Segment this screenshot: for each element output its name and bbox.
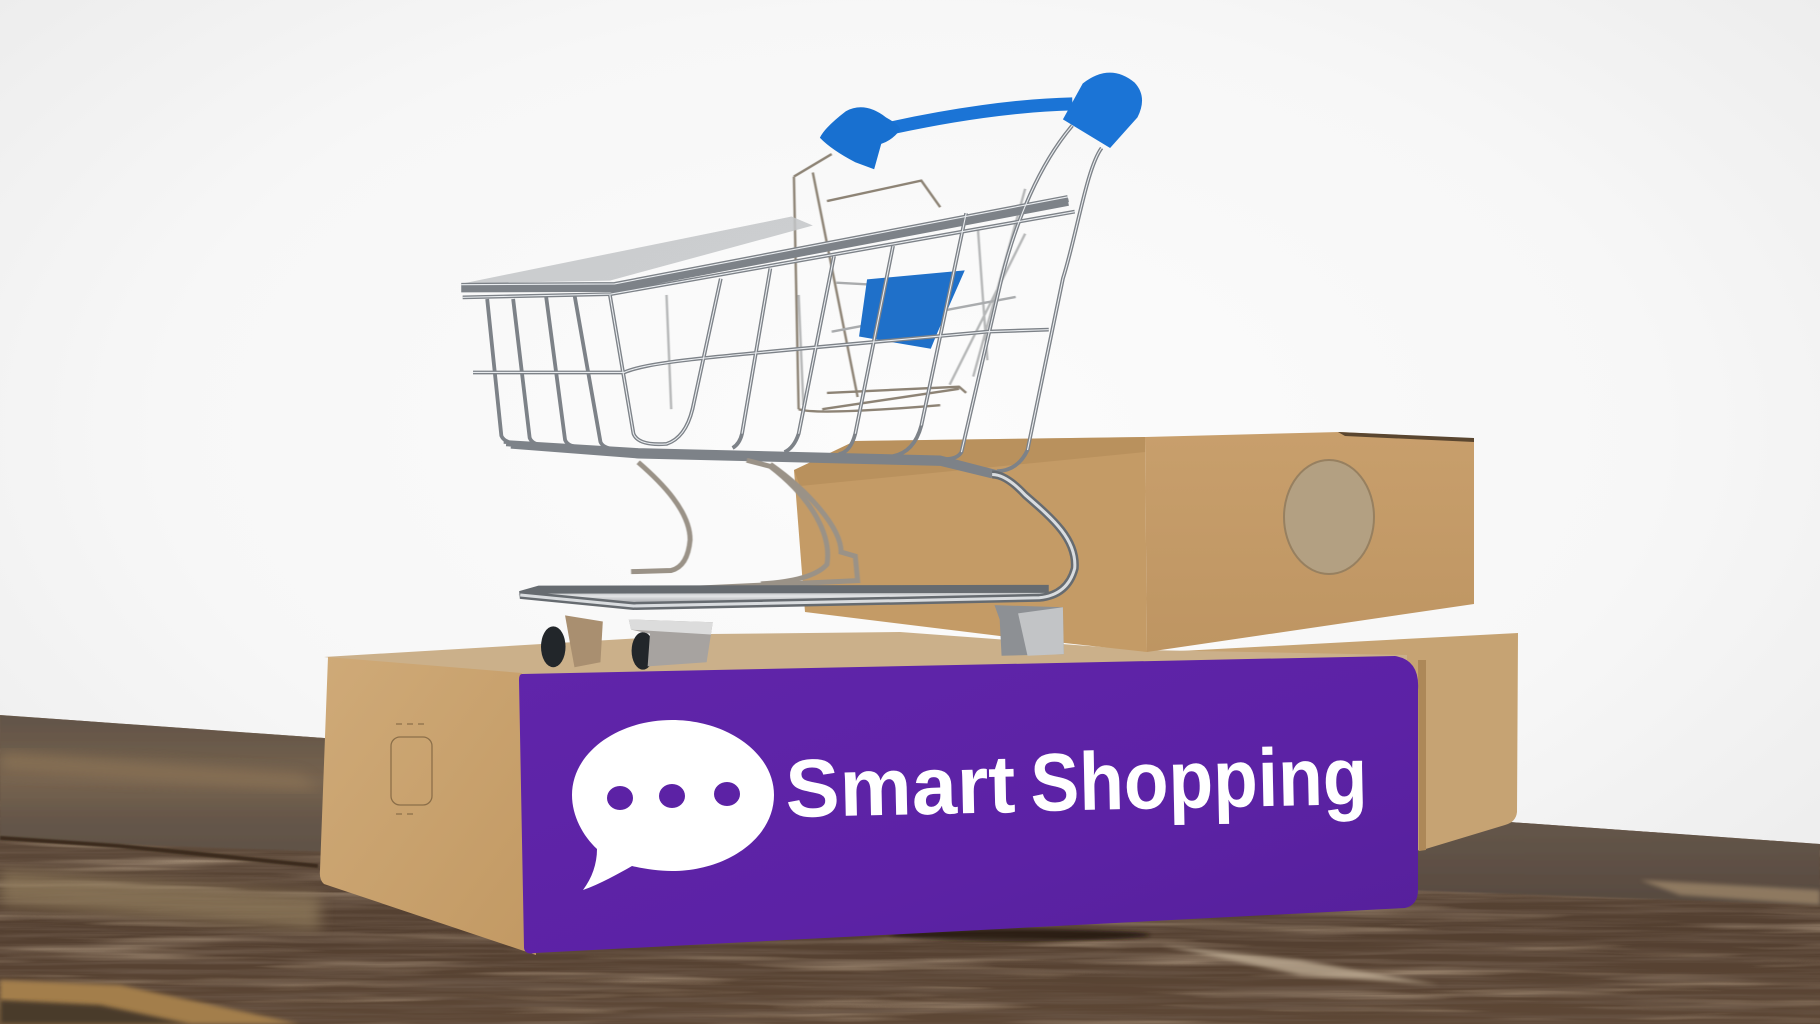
front box left kraft face [320, 657, 536, 955]
cart wire dark pass [461, 126, 1102, 477]
upper box left face [794, 437, 1147, 652]
shopping cart [461, 73, 1142, 670]
logo text [784, 731, 1368, 835]
cart handle left knot [820, 107, 900, 169]
cart seat blue flap [859, 270, 965, 349]
wooden table [0, 700, 1820, 1024]
upper box lid gap [1338, 432, 1474, 442]
purple label panel [519, 656, 1418, 953]
cart rear basket, out of focus [667, 154, 1025, 412]
ground shadow under box [890, 929, 1150, 941]
cart handle bar [893, 104, 1072, 128]
cardboard box: upper box [794, 432, 1474, 652]
cart rim far side [463, 217, 813, 283]
cart base plate [518, 588, 1049, 608]
logo text: Shopping [1029, 731, 1368, 829]
cart front chassis [520, 475, 1075, 606]
cardboard box: top surface of front box [324, 632, 1407, 676]
upper box round window [1284, 460, 1374, 574]
cart wheel left [541, 615, 603, 667]
bubble dots [607, 782, 740, 810]
cart wire highlight pass [461, 126, 1102, 452]
upper box right face [1145, 432, 1474, 652]
logo: chat bubble [572, 720, 774, 890]
embossed icon [391, 724, 432, 814]
cart wheel centre [629, 619, 713, 670]
cart rear chassis [631, 460, 858, 591]
logo text: Smart [784, 739, 1016, 835]
cart wheel right [994, 605, 1064, 656]
cardboard box: lower back box [1142, 633, 1518, 851]
cart handle right grip [1063, 73, 1142, 148]
